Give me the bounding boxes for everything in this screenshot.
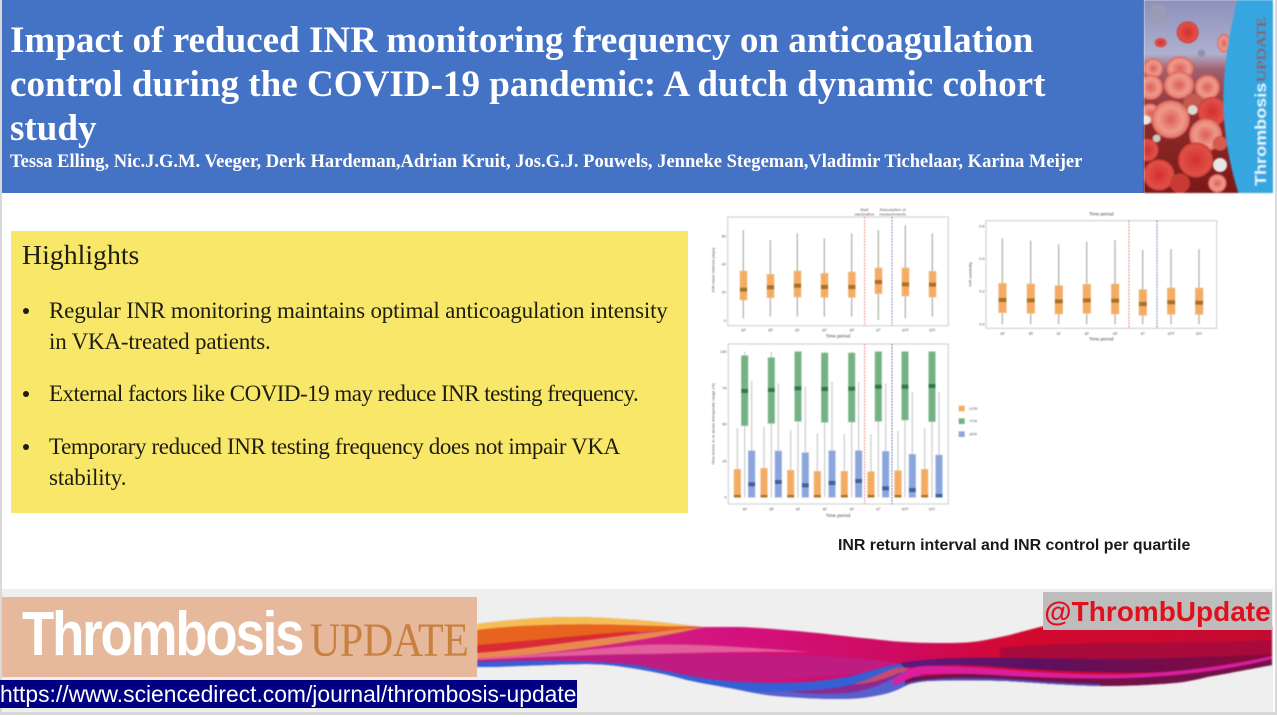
y ticks <box>979 223 985 326</box>
spine title: Thrombosis <box>1253 83 1270 186</box>
y ticks: 0 <box>724 495 727 500</box>
boxes <box>740 268 936 300</box>
x ticks: q4 <box>741 327 746 332</box>
x ticks: q4 <box>742 506 748 511</box>
x ticks: q10 <box>1168 330 1175 335</box>
highlight 1: in VKA-treated patients. <box>49 329 271 354</box>
ATR boxes <box>748 451 942 497</box>
whiskers <box>743 225 932 320</box>
colour ribbon <box>477 616 1274 700</box>
cover background <box>1144 0 1273 193</box>
y ticks: 0.2 <box>979 289 985 294</box>
y axis title: INR variability <box>968 262 973 287</box>
y ticks: 0.4 <box>979 256 985 261</box>
event labels: measurements <box>879 212 906 217</box>
x ticks: q10 <box>902 327 909 332</box>
plot frame <box>986 221 1217 328</box>
x ticks <box>1000 330 1203 335</box>
TTR boxes <box>741 352 935 426</box>
chart: time below, in and above therapeutic range <box>711 343 978 518</box>
title <box>10 20 1046 149</box>
y ticks: 40 <box>722 262 727 267</box>
legend: TTR <box>969 419 977 424</box>
title: control during the COVID-19 pandemic: A dutch dynamic cohort <box>10 64 1046 105</box>
x ticks: q2 <box>1084 330 1090 335</box>
x axis title: Time period <box>826 334 851 339</box>
purple inner band <box>785 673 902 694</box>
logo word UPDATE: UPDATE <box>310 614 468 667</box>
red band <box>477 631 640 653</box>
x ticks: q1 <box>796 506 801 511</box>
x ticks: q5 <box>768 327 773 332</box>
y ticks: 0.6 <box>979 223 985 228</box>
x ticks <box>742 506 936 511</box>
y ticks: 50 <box>722 422 727 427</box>
y ticks: 80 <box>722 234 727 239</box>
lower blue-violet band <box>750 670 921 700</box>
boxes <box>999 283 1203 315</box>
event labels: vaccination <box>854 212 874 217</box>
whiskers <box>1002 238 1199 324</box>
logo word Thrombosis: Thrombosis <box>22 600 302 669</box>
spine title: UPDATE <box>1254 17 1268 82</box>
orange band <box>477 624 705 646</box>
medians <box>740 280 936 292</box>
y ticks <box>722 234 727 323</box>
cyan spine <box>1223 0 1273 193</box>
legend: ATR <box>969 432 977 437</box>
dark crimson band <box>1000 640 1272 662</box>
dark purple band <box>900 654 1272 673</box>
light orange streak <box>477 627 705 659</box>
x ticks: q11 <box>1196 330 1203 335</box>
highlight 1 <box>23 298 668 354</box>
x ticks: q3 <box>1113 330 1118 335</box>
x ticks: q7 <box>876 506 881 511</box>
publisher logo <box>1151 5 1165 23</box>
top axis title: Time period <box>1089 212 1114 217</box>
ribbon base <box>478 616 1274 700</box>
x ticks: q2 <box>822 327 827 332</box>
y ticks: 25 <box>722 458 727 463</box>
highlight 3: stability. <box>49 465 126 490</box>
x ticks: q5 <box>769 506 774 511</box>
TTR medians <box>741 384 935 393</box>
x ticks: q11 <box>929 327 936 332</box>
plot frame <box>728 344 948 504</box>
magenta underside <box>477 654 900 682</box>
ribbon bands <box>477 616 1274 700</box>
event lines <box>865 344 892 504</box>
pink streak <box>477 644 810 661</box>
x ticks: q7 <box>876 327 881 332</box>
journal logo <box>2 597 477 677</box>
UTR boxes <box>734 468 928 497</box>
footer band <box>2 589 1273 712</box>
highlights heading: Highlights <box>22 240 139 271</box>
x ticks: q4 <box>1000 330 1005 335</box>
x ticks: q3 <box>849 506 855 511</box>
yellow band <box>477 616 701 631</box>
panel: highlights <box>11 231 688 513</box>
x ticks: q7 <box>1140 330 1146 335</box>
medians <box>999 298 1203 306</box>
title: study <box>10 108 97 149</box>
y ticks: 0.0 <box>979 321 985 326</box>
header banner <box>2 0 1144 193</box>
magenta band <box>893 656 1272 686</box>
x axis title: Time period <box>826 513 851 518</box>
coral accent <box>852 667 909 684</box>
x ticks: q11 <box>929 506 936 511</box>
blue lower edge <box>905 680 1100 686</box>
y ticks: 0 <box>724 318 727 323</box>
legend <box>959 406 978 437</box>
y axis title: Time below, in or above therapeutic range (%) <box>711 382 716 465</box>
chart: INR return interval <box>711 207 950 339</box>
x ticks <box>741 327 936 332</box>
social handle: @ThrombUpdate <box>1044 596 1271 627</box>
chart: INR variability <box>968 212 1218 342</box>
event labels: Start <box>860 207 869 212</box>
x ticks: q1 <box>795 327 800 332</box>
event labels <box>854 207 906 217</box>
plot frame <box>728 217 948 326</box>
y ticks: 20 <box>722 290 727 295</box>
event labels: Resumption of <box>880 207 906 212</box>
event lines <box>865 217 892 326</box>
y ticks <box>720 349 727 500</box>
x ticks: q10 <box>902 506 909 511</box>
red blood cells <box>1136 21 1231 193</box>
highlight 3: Temporary reduced INR testing frequency does not impair VKA <box>49 434 620 459</box>
ATR medians <box>748 479 942 497</box>
x ticks: q2 <box>822 506 828 511</box>
spine title <box>1253 17 1270 186</box>
authors: Tessa Elling, Nic.J.G.M. Veeger, Derk Hardeman,Adrian Kruit, Jos.G.J. Pouwels, Jenneke Stegeman,Vladimir Tichelaar, Karina Meijer <box>10 151 1082 172</box>
whiskers <box>737 352 939 497</box>
highlight 3 <box>23 434 620 490</box>
x ticks: q3 <box>849 327 855 332</box>
event lines <box>1129 221 1157 328</box>
legend: UTR <box>969 406 978 411</box>
highlight 2: External factors like COVID-19 may reduce INR testing frequency. <box>49 381 638 406</box>
journal URL: https://www.sciencedirect.com/journal/thrombosis-update <box>0 681 576 707</box>
x ticks: q5 <box>1028 330 1034 335</box>
title: Impact of reduced INR monitoring frequency on anticoagulation <box>10 20 1033 61</box>
y ticks: 75 <box>722 385 727 390</box>
chart caption: INR return interval and INR control per quartile <box>838 537 1190 554</box>
journal cover <box>1143 0 1274 194</box>
y axis title: INR return interval (days) <box>711 247 716 292</box>
x ticks: q1 <box>1056 330 1062 335</box>
maroon underside <box>904 659 1272 687</box>
x axis title: Time period <box>1089 337 1114 342</box>
UTR medians <box>734 495 928 497</box>
y ticks: 100 <box>720 349 727 354</box>
highlight 1: Regular INR monitoring maintains optimal anticoagulation intensity <box>49 298 668 323</box>
blue band <box>477 661 907 692</box>
